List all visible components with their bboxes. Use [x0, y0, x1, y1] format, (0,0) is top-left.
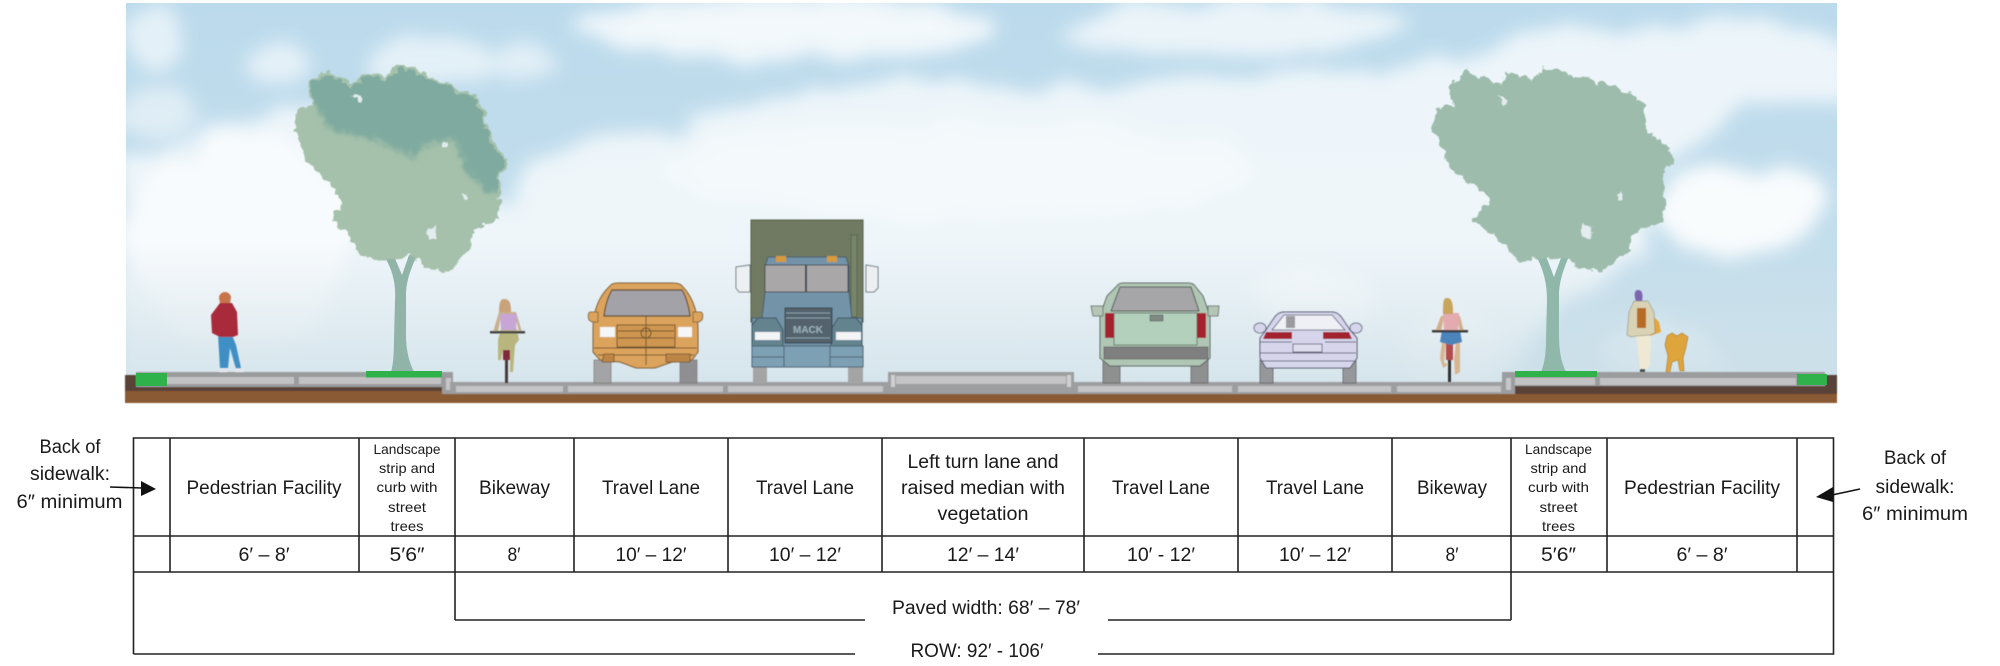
column headers: Bikeway: [1417, 478, 1487, 499]
callout: back of sidewalk right: sidewalk:: [1876, 477, 1954, 498]
column headers: strip and: [379, 460, 435, 476]
column headers: Travel Lane: [756, 478, 854, 499]
column headers: Pedestrian Facility: [186, 478, 342, 499]
column headers: trees: [1542, 518, 1575, 534]
column headers: Travel Lane: [602, 478, 700, 499]
callout: back of sidewalk left: 6″ minimum: [16, 492, 122, 513]
right-of-way label: ROW: 92′ - 106′: [910, 641, 1044, 662]
column headers: vegetation: [938, 504, 1028, 525]
callout: back of sidewalk right: 6″ minimum: [1862, 504, 1968, 525]
column headers: Travel Lane: [1266, 478, 1364, 499]
column widths: [238, 545, 1728, 566]
column headers: Travel Lane: [1112, 478, 1210, 499]
dog: [1665, 333, 1688, 372]
lavender sedan rear view: [1254, 312, 1362, 383]
column widths: 12′ – 14′: [947, 545, 1019, 566]
box truck with MACK cab: MACK: [793, 325, 824, 336]
column headers: curb with: [376, 479, 438, 495]
column widths: 6′ – 8′: [1676, 545, 1728, 566]
callout: back of sidewalk left: [16, 437, 122, 513]
column widths: 8′: [1446, 545, 1459, 566]
arrow: left callout to table: [110, 481, 156, 496]
pedestrian left: [211, 292, 244, 372]
orange pickup truck: [588, 283, 703, 383]
box truck with MACK cab: [736, 220, 878, 383]
column headers: Bikeway: [479, 478, 551, 499]
column widths: 10′ - 12′: [1127, 545, 1195, 566]
panel: street cross-section illustration: [118, 0, 1850, 403]
green SUV rear view: [1091, 283, 1219, 383]
column headers: [186, 441, 1780, 534]
callout: back of sidewalk left: Back of: [40, 437, 101, 458]
column widths: 8′: [508, 545, 521, 566]
tree left: [290, 60, 520, 372]
dimension table: [134, 438, 1834, 662]
column headers: street: [388, 499, 426, 515]
tree right: [1436, 69, 1670, 372]
column headers: Landscape: [1525, 441, 1592, 457]
column headers: curb with: [1528, 479, 1589, 495]
ground and road section: [125, 372, 1837, 403]
sky with clouds: [118, 0, 1850, 400]
cyclist right: [1432, 298, 1468, 382]
cyclist left: [490, 299, 525, 383]
column widths: 5′6″: [390, 545, 425, 566]
paved width label: Paved width: 68′ – 78′: [892, 598, 1080, 619]
column widths: 5′6″: [1541, 545, 1576, 566]
column widths: 10′ – 12′: [616, 545, 687, 566]
column widths: 6′ – 8′: [238, 545, 290, 566]
column headers: strip and: [1530, 460, 1586, 476]
column widths: 10′ – 12′: [769, 545, 841, 566]
callout: back of sidewalk right: Back of: [1884, 448, 1947, 469]
callout: back of sidewalk left: sidewalk:: [30, 464, 110, 485]
column headers: Left turn lane and: [908, 452, 1058, 473]
callout: back of sidewalk right: [1862, 448, 1968, 525]
table grid: [134, 438, 1834, 654]
column headers: Pedestrian Facility: [1624, 478, 1780, 499]
pedestrian with dog: [1627, 290, 1688, 372]
planting strips: [136, 371, 1827, 386]
arrow: right callout to table: [1816, 487, 1860, 502]
column headers: street: [1540, 499, 1578, 515]
column headers: trees: [390, 518, 424, 534]
column widths: 10′ – 12′: [1279, 545, 1351, 566]
column headers: raised median with: [901, 478, 1065, 499]
column headers: Landscape: [374, 441, 441, 457]
